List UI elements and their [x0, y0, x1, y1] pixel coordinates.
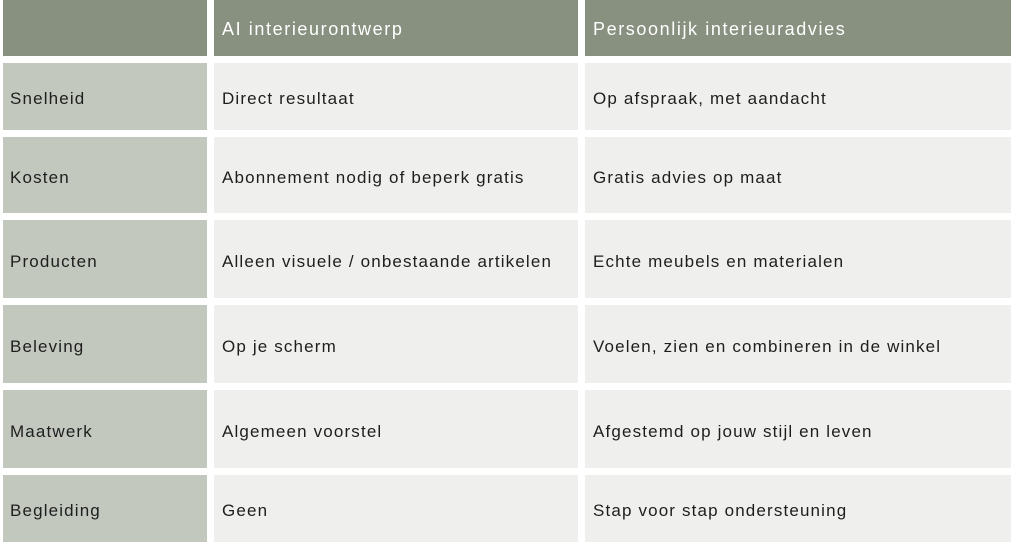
header row	[3, 0, 1011, 56]
text: Snelheid	[10, 89, 85, 108]
text: Direct resultaat	[222, 89, 355, 108]
row: Begleiding	[3, 475, 1011, 542]
text: Geen	[222, 501, 268, 520]
text: Alleen visuele / onbestaande artikelen	[222, 252, 552, 270]
text: Kosten	[10, 168, 70, 186]
row: Beleving	[3, 305, 1011, 383]
text: Echte meubels en materialen	[593, 252, 844, 270]
text: Op je scherm	[222, 336, 337, 356]
text: Begleiding	[10, 501, 101, 520]
row: Producten	[3, 220, 1011, 298]
header: AI: AI interieurontwerp	[222, 18, 403, 38]
text: Voelen, zien en combineren in de winkel	[593, 336, 941, 356]
row: Maatwerk	[3, 390, 1011, 468]
header: AI	[214, 0, 578, 56]
text: Algemeen voorstel	[222, 422, 382, 440]
row: Kosten	[3, 137, 1011, 213]
text: Stap voor stap ondersteuning	[593, 501, 847, 520]
text: Afgestemd op jouw stijl en leven	[593, 422, 873, 440]
text: Beleving	[10, 336, 84, 356]
text: Op afspraak, met aandacht	[593, 89, 827, 108]
text: Maatwerk	[10, 422, 93, 440]
text: Producten	[10, 252, 98, 270]
text: Abonnement nodig of beperk gratis	[222, 168, 525, 186]
row: Snelheid	[3, 63, 1011, 130]
header: personal: Persoonlijk interieuradvies	[593, 18, 846, 38]
text: Gratis advies op maat	[593, 168, 783, 186]
header: personal	[585, 0, 1011, 56]
